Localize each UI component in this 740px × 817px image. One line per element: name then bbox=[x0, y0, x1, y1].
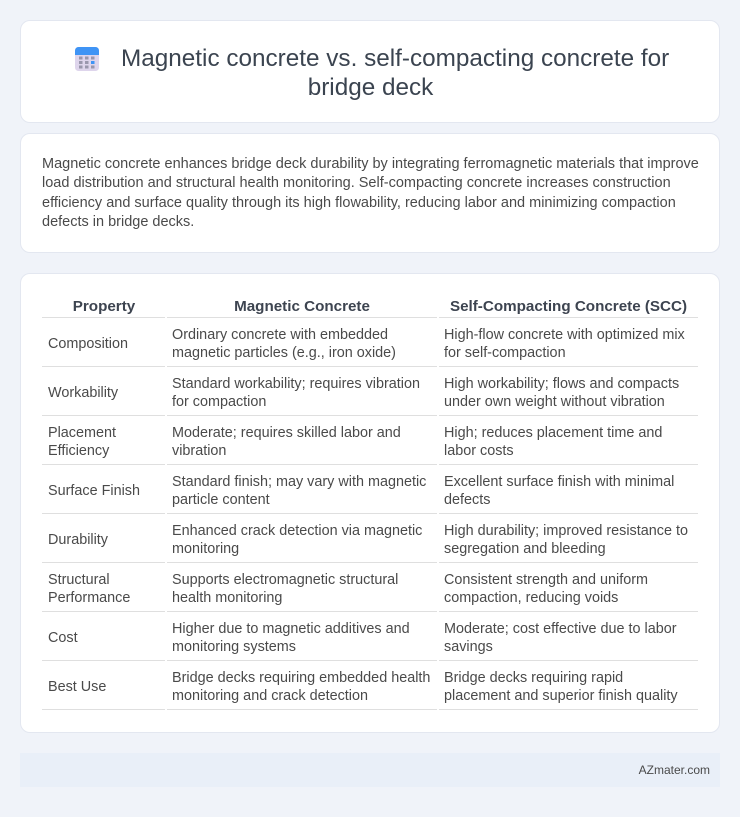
title bbox=[121, 45, 669, 101]
text: High-flow concrete with optimized mix bbox=[444, 327, 685, 343]
text: vibration bbox=[172, 443, 226, 459]
row: workability bbox=[48, 376, 679, 410]
row: surface finish bbox=[48, 474, 674, 508]
text: magnetic particles (e.g., iron oxide) bbox=[172, 345, 396, 361]
text: Supports electromagnetic structural bbox=[172, 572, 398, 588]
text: Durability bbox=[48, 532, 108, 548]
title: bridge deck bbox=[308, 74, 433, 101]
text: segregation and bleeding bbox=[444, 541, 606, 557]
text: Excellent surface finish with minimal bbox=[444, 474, 674, 490]
text: monitoring bbox=[172, 541, 239, 557]
text: High workability; flows and compacts bbox=[444, 376, 679, 392]
text: Structural bbox=[48, 572, 110, 588]
icon: calendar bbox=[75, 47, 99, 71]
text: labor costs bbox=[444, 443, 514, 459]
text: Composition bbox=[48, 336, 128, 352]
text: Workability bbox=[48, 385, 118, 401]
text block: summary: Magnetic concrete enhances bridge deck durability by integrating ferromagnetic materials that improve bbox=[42, 156, 699, 172]
text: Consistent strength and uniform bbox=[444, 572, 648, 588]
row: best use bbox=[48, 670, 678, 704]
panel: intro paragraph bbox=[20, 133, 720, 253]
text: High durability; improved resistance to bbox=[444, 523, 688, 539]
footer bar bbox=[20, 753, 720, 787]
table header bbox=[73, 298, 687, 315]
text: placement and superior finish quality bbox=[444, 688, 678, 704]
text: Performance bbox=[48, 590, 130, 606]
text: Efficiency bbox=[48, 443, 109, 459]
footer source label: AZmater.com bbox=[639, 763, 710, 777]
text: for compaction bbox=[172, 394, 266, 410]
panel: title header bbox=[20, 20, 720, 123]
row: durability bbox=[48, 523, 688, 557]
text: health monitoring bbox=[172, 590, 282, 606]
row: placement efficiency bbox=[48, 425, 662, 459]
text: monitoring and crack detection bbox=[172, 688, 368, 704]
text: Moderate; requires skilled labor and bbox=[172, 425, 401, 441]
text block: summary: defects in bridge decks. bbox=[42, 214, 194, 230]
text block: summary: load distribution and structural health monitoring. Self-compacting concrete increases construction bbox=[42, 175, 671, 191]
text block: summary: efficiency and surface quality through its high flowability, reducing labor and minimizing compaction bbox=[42, 195, 676, 211]
table header: Property bbox=[73, 298, 135, 315]
text: Bridge decks requiring embedded health bbox=[172, 670, 430, 686]
row: cost bbox=[48, 621, 677, 655]
text: under own weight without vibration bbox=[444, 394, 665, 410]
text: compaction, reducing voids bbox=[444, 590, 618, 606]
text: Standard workability; requires vibration bbox=[172, 376, 420, 392]
text: Bridge decks requiring rapid bbox=[444, 670, 623, 686]
text: Standard finish; may vary with magnetic bbox=[172, 474, 426, 490]
panel: comparison table bbox=[20, 273, 720, 733]
text: High; reduces placement time and bbox=[444, 425, 662, 441]
table header: Magnetic Concrete bbox=[234, 298, 370, 315]
text: Ordinary concrete with embedded bbox=[172, 327, 388, 343]
text: for self-compaction bbox=[444, 345, 566, 361]
text: Higher due to magnetic additives and bbox=[172, 621, 410, 637]
text: Surface Finish bbox=[48, 483, 140, 499]
text: particle content bbox=[172, 492, 270, 508]
text: defects bbox=[444, 492, 490, 508]
row: structural performance bbox=[48, 572, 648, 606]
table header: Self-Compacting Concrete (SCC) bbox=[450, 298, 687, 315]
text: Enhanced crack detection via magnetic bbox=[172, 523, 422, 539]
text: savings bbox=[444, 639, 493, 655]
text: Placement bbox=[48, 425, 116, 441]
row: composition bbox=[48, 327, 685, 361]
text: Best Use bbox=[48, 679, 106, 695]
title: Magnetic concrete vs. self-compacting concrete for bbox=[121, 45, 669, 72]
text: Moderate; cost effective due to labor bbox=[444, 621, 677, 637]
text block: summary bbox=[42, 156, 699, 230]
text: monitoring systems bbox=[172, 639, 296, 655]
text: Cost bbox=[48, 630, 78, 646]
